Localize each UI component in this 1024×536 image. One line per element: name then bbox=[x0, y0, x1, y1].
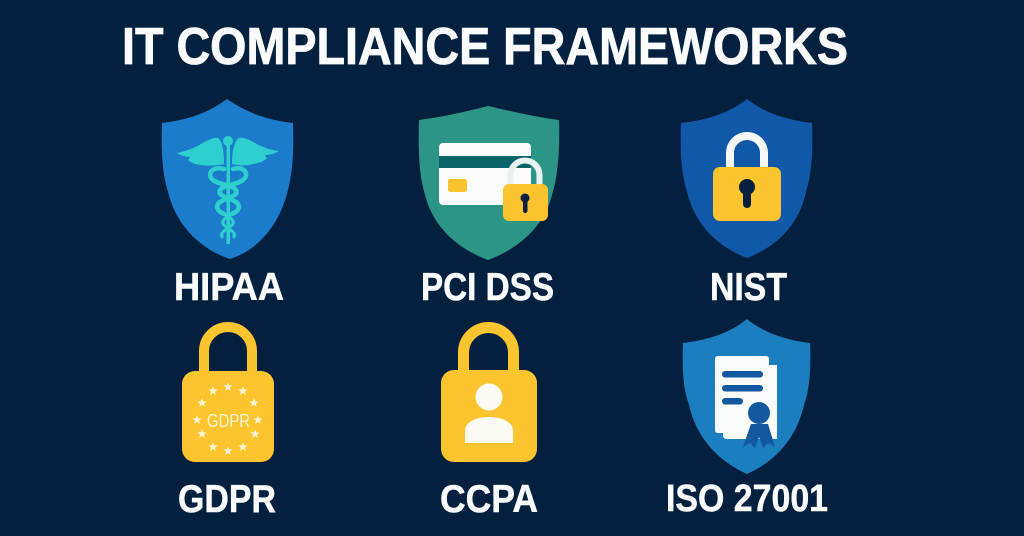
icon: GDPR padlock with stars bbox=[182, 327, 274, 462]
label: CCPA: CCPA bbox=[440, 478, 538, 521]
icon: HIPAA shield with caduceus bbox=[162, 99, 293, 259]
icon: PCI DSS shield with card and lock bbox=[419, 106, 559, 260]
title: IT COMPLIANCE FRAMEWORKS bbox=[122, 18, 848, 76]
label: HIPAA: HIPAA bbox=[174, 266, 284, 309]
icon: NIST shield with padlock bbox=[681, 99, 812, 258]
icon: GDPR padlock with stars: GDPR bbox=[207, 410, 250, 431]
label: GDPR: GDPR bbox=[178, 478, 276, 521]
icon: CCPA padlock with person bbox=[441, 328, 537, 462]
label: PCI DSS: PCI DSS bbox=[421, 266, 554, 309]
label: NIST: NIST bbox=[710, 266, 787, 309]
label: ISO 27001: ISO 27001 bbox=[666, 478, 828, 520]
icon: ISO 27001 shield with certificate bbox=[683, 319, 810, 474]
